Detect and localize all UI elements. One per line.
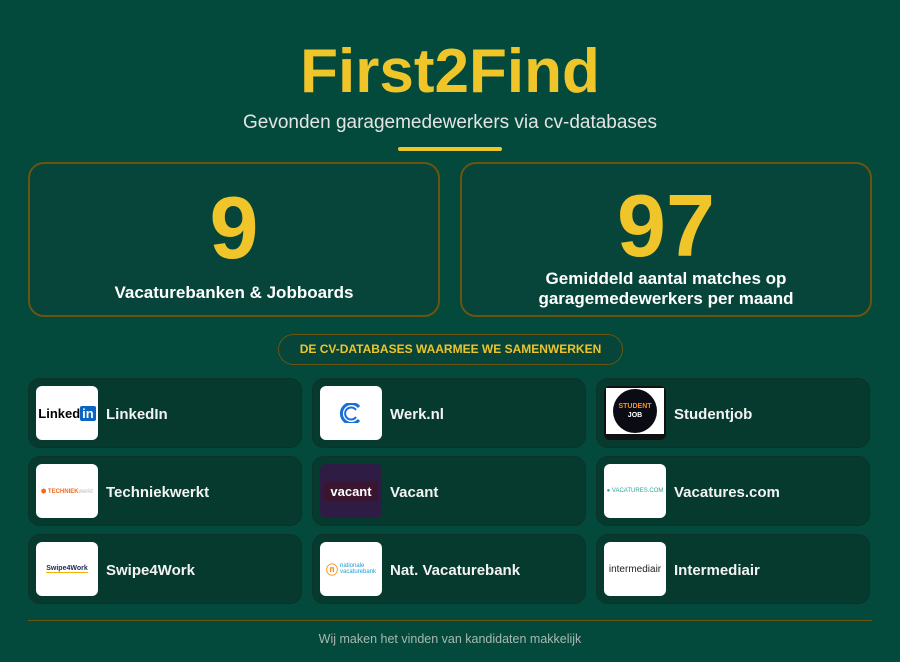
accent bar xyxy=(398,147,502,151)
card: Werk.nl: Werk.nl xyxy=(390,406,444,423)
section pill xyxy=(278,334,623,365)
logo: Swipe4Work xyxy=(36,542,98,596)
card: Studentjob: Studentjob xyxy=(674,406,752,423)
card: Werk.nl xyxy=(312,378,586,448)
card: Intermediair xyxy=(596,534,870,604)
panel: stat vacaturebanken xyxy=(28,162,440,317)
label: Vacaturebanken & Jobboards xyxy=(114,283,354,302)
logo: Swipe4Work: Swipe4Work xyxy=(46,565,88,572)
logo: Intermediair: intermediair xyxy=(609,564,661,574)
logo: Techniekwerkt xyxy=(36,464,98,518)
logo: Nationale Vacaturebank: ⓝ xyxy=(326,562,338,576)
card: Nat. Vacaturebank: Nat. Vacaturebank xyxy=(390,562,520,579)
subtitle: Gevonden garagemedewerkers via cv-databases xyxy=(243,112,657,133)
logo: LinkedIn xyxy=(36,386,98,440)
logo: Vacatures.com: ● VACATURES.COM xyxy=(607,488,663,494)
panel: stat matches xyxy=(460,162,872,317)
logo: Studentjob: JOB xyxy=(628,412,642,419)
title: First2Find xyxy=(300,37,600,106)
logo: Intermediair xyxy=(604,542,666,596)
logo: Vacatures.com xyxy=(604,464,666,518)
logo: Nationale Vacaturebank xyxy=(320,542,382,596)
label xyxy=(538,269,794,308)
logo: LinkedIn: Linkedin xyxy=(38,406,94,420)
card: Swipe4Work xyxy=(28,534,302,604)
logo: Werk.nl xyxy=(320,386,382,440)
logo: Vacant: vacant xyxy=(330,484,372,498)
number 9: 9 xyxy=(210,178,258,277)
logo: Nationale Vacaturebank: vacaturebank xyxy=(340,569,376,575)
card: Vacatures.com: Vacatures.com xyxy=(674,484,780,501)
card: Vacatures.com xyxy=(596,456,870,526)
card: Studentjob xyxy=(596,378,870,448)
logo: Vacant xyxy=(320,464,382,518)
number 97: 97 xyxy=(617,176,715,275)
card: Swipe4Work: Swipe4Work xyxy=(106,562,195,579)
logo: Studentjob: STUDENT xyxy=(618,403,652,410)
logo: Techniekwerkt: ⬢ TECHNIEKwerkt xyxy=(41,488,93,494)
footer: Wij maken het vinden van kandidaten makkelijk xyxy=(319,632,581,646)
card: LinkedIn xyxy=(28,378,302,448)
card: Intermediair: Intermediair xyxy=(674,562,760,579)
label: Gemiddeld aantal matches op xyxy=(546,269,786,288)
logo: Studentjob xyxy=(604,386,666,440)
card: Nat. Vacaturebank xyxy=(312,534,586,604)
label: garagemedewerkers per maand xyxy=(538,289,794,308)
card: Techniekwerkt xyxy=(28,456,302,526)
card: Vacant xyxy=(312,456,586,526)
card: Vacant: Vacant xyxy=(390,484,438,501)
card: LinkedIn: LinkedIn xyxy=(106,406,168,423)
logo: Nationale Vacaturebank: nationale xyxy=(340,563,364,569)
section pill: DE CV-DATABASES WAARMEE WE SAMENWERKEN xyxy=(300,342,601,356)
card: Techniekwerkt: Techniekwerkt xyxy=(106,484,209,501)
